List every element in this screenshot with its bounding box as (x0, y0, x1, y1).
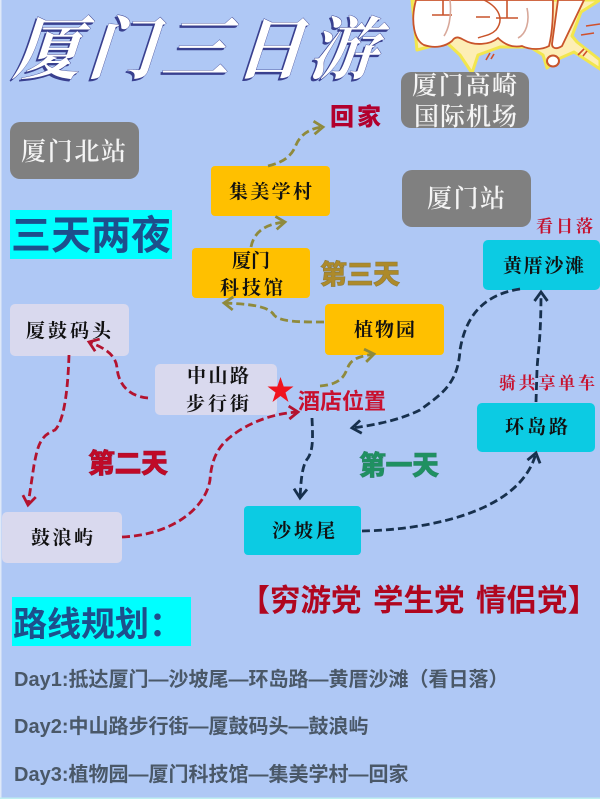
stop: 鼓浪屿 (2, 512, 122, 563)
stop: 植物园 (325, 304, 444, 355)
tagline: 学生党 (373, 584, 464, 618)
stop: 中山路步行街: 步行街 (186, 392, 249, 415)
stop: 沙坡尾: 沙坡尾 (272, 520, 335, 542)
tagline: 【穷游党 (240, 584, 362, 618)
stop: 厦门科技馆: 科技馆 (220, 276, 283, 299)
label: 第一天: 第一天 (359, 450, 439, 481)
arrows: day 1 route (300, 289, 541, 531)
day 3 route text: Day3:植物园—厦门科技馆—集美学村—回家 (14, 762, 408, 786)
tagline: 情侣党】 (476, 584, 598, 618)
stop: 中山路步行街: 中山路 (187, 365, 249, 387)
station: 厦门高崎国际机场 (401, 72, 529, 131)
station: 厦门高崎国际机场: 厦门高崎 (412, 72, 517, 100)
station: 厦门北站 (10, 122, 139, 179)
heading: 路线规划: 路线规划： (13, 606, 183, 644)
station: 厦门站: 厦门站 (427, 185, 505, 213)
stop: 环岛路 (477, 403, 595, 452)
stop: 沙坡尾 (244, 506, 361, 555)
station: 厦门北站: 厦门北站 (21, 138, 126, 166)
label: 骑共享单车: 骑共享单车 (499, 373, 595, 393)
stop: 厦门科技馆 (192, 248, 310, 299)
stop: 集美学村 (211, 166, 330, 216)
day 1 route text: Day1:抵达厦门—沙坡尾—环岛路—黄厝沙滩（看日落） (14, 668, 508, 691)
station: 厦门高崎国际机场: 国际机场 (414, 103, 517, 131)
stop: 鼓浪屿: 鼓浪屿 (31, 527, 93, 549)
title: 厦门三日游 (7, 14, 401, 89)
stop: 植物园: 植物园 (354, 319, 415, 341)
stop: 中山路步行街 (155, 364, 277, 415)
stop: 黄厝沙滩 (483, 240, 600, 290)
arrows: day 3 route (224, 127, 374, 386)
illustration: comic burst with lettering (412, 0, 600, 73)
stop: 环岛路: 环岛路 (505, 415, 568, 438)
stop: 厦门科技馆: 厦门 (232, 249, 270, 272)
stop: 黄厝沙滩: 黄厝沙滩 (503, 254, 584, 277)
stop: 集美学村: 集美学村 (229, 180, 312, 203)
stop: 厦鼓码头: 厦鼓码头 (26, 319, 113, 342)
stop: 厦鼓码头 (10, 304, 129, 356)
label: 看日落: 看日落 (536, 216, 593, 236)
icon: hotel star (268, 377, 294, 402)
label: 第三天: 第三天 (320, 259, 400, 290)
badge: 三天两夜: 三天两夜 (11, 214, 171, 258)
arrows: day 2 route (28, 342, 298, 537)
label: 酒店位置: 酒店位置 (298, 389, 386, 414)
day 2 route text: Day2:中山路步行街—厦鼓码头—鼓浪屿 (14, 714, 368, 738)
station: 厦门站 (402, 170, 531, 227)
label: 第二天: 第二天 (88, 448, 168, 479)
label: 回家: 回家 (330, 103, 381, 131)
route list (14, 668, 508, 786)
